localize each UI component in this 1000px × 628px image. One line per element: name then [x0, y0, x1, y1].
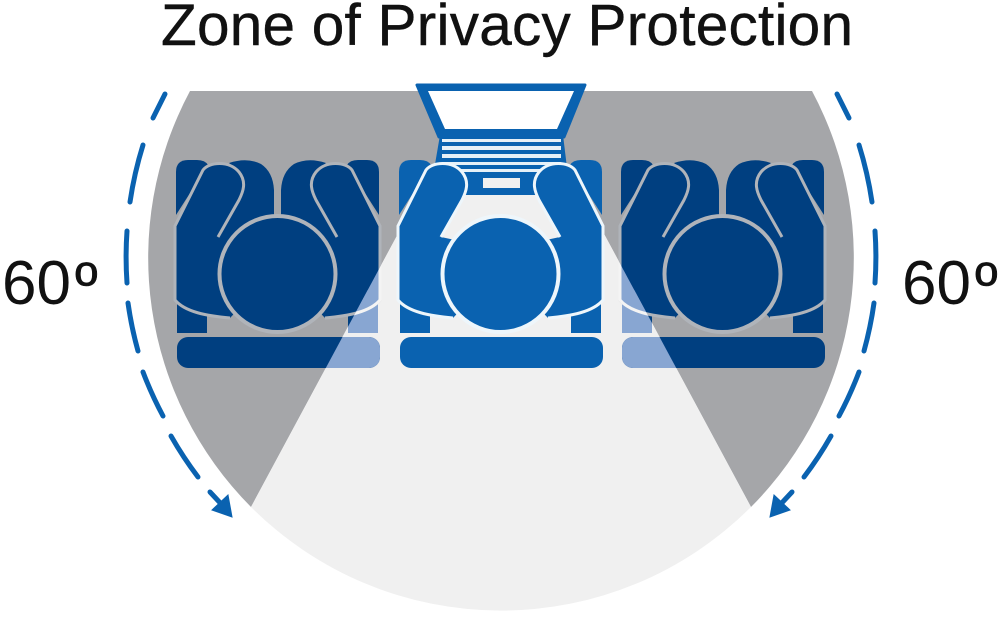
left 60 degree arrow — [126, 94, 232, 517]
right angle label: 60 — [902, 249, 971, 318]
left passenger — [175, 160, 380, 368]
viewing zone: light visible wedge — [251, 165, 751, 611]
seat and occupant — [398, 160, 603, 368]
left angle label: º — [75, 251, 98, 320]
icon: laptop — [417, 85, 585, 195]
viewing zone: grey blocked area — [148, 91, 854, 507]
right passenger — [620, 160, 825, 368]
right angle label: º — [975, 251, 998, 320]
left angle label: 60 — [2, 249, 71, 318]
right 60 degree arrow — [770, 94, 876, 517]
centre user with laptop — [398, 85, 603, 368]
